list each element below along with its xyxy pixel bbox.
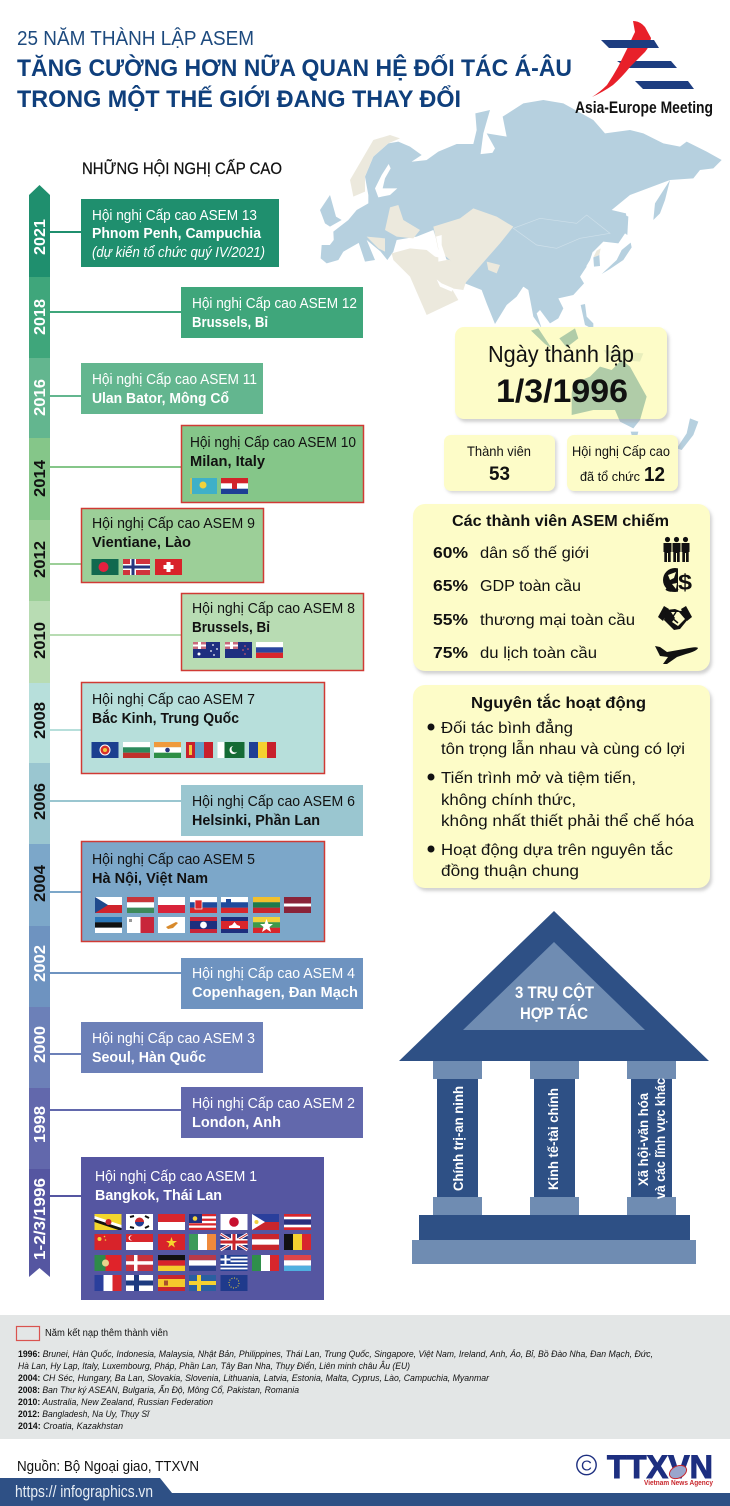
- panel: ASEM members share: thương mại toàn cầu: [480, 612, 635, 629]
- panel: membership notes: [0, 1315, 730, 1439]
- kicker: 25 NĂM THÀNH LẬP ASEM: [17, 27, 254, 50]
- member list by year: Hà Lan, Hy Lạp, Italy, Luxembourg, Pháp, Phần Lan, Tây Ban Nha, Thụy Điển, Liên minh châu Âu (EU): [18, 1361, 410, 1372]
- map showing through card: Australia and Indonesia: [531, 328, 647, 428]
- headline line 1: TĂNG CƯỜNG HƠN NỮA QUAN HỆ ĐỐI TÁC Á-ÂU: [17, 54, 572, 82]
- panel: founding date: 1/3/1996: [496, 373, 628, 409]
- panel: summits held: 12: [644, 464, 665, 486]
- member list by year: 2010: Australia, New Zealand, Russian Federation: [18, 1397, 213, 1408]
- panel: operating principles: không chính thức,: [441, 792, 576, 809]
- panel: operating principles: không nhất thiết phải thể chế hóa: [441, 812, 694, 830]
- pillar: politics and security: [433, 1061, 482, 1215]
- panel: ASEM 13: Hội nghị Cấp cao ASEM 13: [92, 208, 257, 224]
- timeline arrow with year segments: 2000: [32, 1026, 49, 1063]
- panel: ASEM 2: London, Anh: [192, 1115, 281, 1131]
- flags: Bangladesh, Norway, Switzerland: [92, 559, 182, 575]
- panel: ASEM 2: Hội nghị Cấp cao ASEM 2: [192, 1096, 355, 1112]
- panel: ASEM 3: [50, 1022, 263, 1073]
- pillar: economy and finance: Kinh tế-tài chính: [546, 1088, 561, 1190]
- panel: ASEM 12: Hội nghị Cấp cao ASEM 12: [192, 296, 357, 312]
- member list by year: 2004: CH Séc, Hungary, Ba Lan, Slovakia, Slovenia, Lithuania, Latvia, Estonia, Malta, Cyprus, Lào, Campuchia, Myanmar: [18, 1373, 490, 1384]
- panel: ASEM 6: Helsinki, Phần Lan: [192, 813, 320, 829]
- panel: ASEM 7: Hội nghị Cấp cao ASEM 7: [92, 692, 255, 708]
- panel: ASEM 9: Vientiane, Lào: [92, 535, 191, 551]
- flags: Kazakhstan, Croatia: [190, 478, 248, 494]
- member list by year: 2014: Croatia, Kazakhstan: [18, 1421, 123, 1432]
- chart: three pillars temple: [399, 911, 709, 1264]
- panel: ASEM members share: [413, 504, 712, 674]
- flags: 1996 row 2: [94, 1234, 311, 1250]
- pillar: society, culture and others: [627, 1061, 676, 1215]
- panel: ASEM 7: Bắc Kinh, Trung Quốc: [92, 709, 239, 727]
- icon: globe and dollar: [663, 566, 693, 595]
- panel: members count: [444, 435, 557, 493]
- pillar: economy and finance: [530, 1061, 579, 1215]
- timeline arrow with year segments: 2016: [32, 379, 49, 416]
- panel: ASEM members share: dân số thế giới: [480, 545, 589, 562]
- panel: ASEM members share: 55%: [433, 612, 468, 629]
- panel: ASEM 4: Hội nghị Cấp cao ASEM 4: [192, 966, 355, 982]
- icon: people: [664, 537, 690, 562]
- flags: 1996 row 1: [94, 1214, 311, 1230]
- flags: 2004 new members, row 2: [95, 917, 280, 933]
- panel: ASEM 10: [50, 426, 364, 502]
- panel: operating principles: Tiến trình mở và tiệm tiến,: [441, 770, 636, 787]
- icon: airplane: [655, 646, 698, 664]
- member list by year: 1996: Brunei, Hàn Quốc, Indonesia, Malaysia, Nhật Bản, Philippines, Thái Lan, Trung Quốc, Singapore, Việt Nam, Ireland, Anh, Áo, Bỉ, Bồ Đào Nha, Đan Mạch, Đức,: [18, 1349, 653, 1360]
- panel: ASEM 7: [50, 682, 324, 774]
- panel: ASEM 1: [50, 1157, 324, 1300]
- pillar: politics and security: Chính trị-an ninh: [451, 1086, 466, 1191]
- logo: TTXVN: TTXVN: [607, 1449, 713, 1485]
- timeline arrow with year segments: 2018: [32, 299, 49, 335]
- flags: 1996 row 4: [94, 1275, 248, 1291]
- panel: ASEM 13: Phnom Penh, Campuchia: [92, 226, 262, 242]
- source line: Nguồn: Bộ Ngoại giao, TTXVN: [17, 1458, 199, 1475]
- flags: 1996 row 3: [94, 1255, 311, 1271]
- logo: TTXVN: C: [581, 1458, 592, 1474]
- timeline arrow with year segments: 2010: [32, 622, 49, 659]
- timeline arrow with year segments: 2014: [32, 460, 49, 497]
- base steps: [412, 1215, 696, 1264]
- member list by year: 2012: Bangladesh, Na Uy, Thụy Sĩ: [18, 1409, 151, 1420]
- panel: ASEM 9: Hội nghị Cấp cao ASEM 9: [92, 516, 255, 532]
- icon: handshake: [658, 606, 692, 630]
- timeline arrow with year segments: 1998: [32, 1106, 49, 1143]
- panel: ASEM 12: [50, 287, 363, 338]
- panel: operating principles: đồng thuận chung: [441, 863, 579, 880]
- timeline arrow with year segments: 2008: [32, 702, 49, 739]
- panel: members count: 53: [489, 463, 510, 485]
- roof: [399, 911, 709, 1061]
- legend: Năm kết nạp thêm thành viên: [45, 1327, 168, 1339]
- panel: ASEM 8: [50, 594, 364, 670]
- title block: [17, 27, 572, 113]
- panel: ASEM 6: [50, 785, 363, 836]
- panel: summits held: [567, 435, 680, 493]
- panel: ASEM 6: Hội nghị Cấp cao ASEM 6: [192, 794, 355, 810]
- panel: ASEM members share: 60%: [433, 545, 468, 562]
- panel: operating principles: Đối tác bình đẳng: [441, 718, 573, 737]
- roof inner triangle with heading: 3 TRỤ CỘT: [515, 983, 594, 1002]
- panel: ASEM 5: [50, 842, 324, 942]
- panel: ASEM 3: Hội nghị Cấp cao ASEM 3: [92, 1031, 255, 1047]
- panel: operating principles: [413, 685, 712, 891]
- panel: ASEM 13: (dự kiến tổ chức quý IV/2021): [92, 245, 265, 261]
- panel: ASEM 10: Milan, Italy: [190, 454, 265, 470]
- footer bar with URL: https:// infographics.vn: [15, 1483, 153, 1501]
- pillar: society, culture and others: và các lĩnh vực khác: [653, 1078, 668, 1199]
- panel: ASEM 3: Seoul, Hàn Quốc: [92, 1050, 206, 1066]
- panel: operating principles: Nguyên tắc hoạt động: [471, 693, 646, 712]
- panel: ASEM members share: GDP toàn cầu: [480, 578, 581, 595]
- panel: ASEM 10: Hội nghị Cấp cao ASEM 10: [190, 435, 356, 451]
- panel: ASEM 1: Hội nghị Cấp cao ASEM 1: [95, 1169, 257, 1185]
- panel: summits held: Hội nghị Cấp cao: [572, 443, 670, 459]
- pillar: society, culture and others: Xã hội-văn hóa: [636, 1093, 651, 1186]
- panel: ASEM 8: Brussels, Bỉ: [192, 620, 270, 636]
- member list by year: 2008: Ban Thư ký ASEAN, Bulgaria, Ấn Độ, Mông Cổ, Pakistan, Romania: [18, 1384, 299, 1396]
- logo: TTXVN: Vietnam News Agency: [644, 1480, 713, 1487]
- panel: ASEM 4: Copenhagen, Đan Mạch: [192, 985, 358, 1001]
- panel: operating principles: Hoạt động dựa trên nguyên tắc: [441, 840, 673, 859]
- panel: ASEM 11: [50, 363, 263, 414]
- panel: ASEM 11: Hội nghị Cấp cao ASEM 11: [92, 372, 257, 388]
- panel: ASEM 8: Hội nghị Cấp cao ASEM 8: [192, 601, 355, 617]
- panel: members count: Thành viên: [467, 443, 531, 459]
- panel: ASEM 13: [50, 199, 279, 267]
- roof inner triangle with heading: [463, 942, 645, 1030]
- panel: operating principles: tôn trọng lẫn nhau và cùng có lợi: [441, 739, 685, 758]
- headline line 2: TRONG MỘT THẾ GIỚI ĐANG THAY ĐỔI: [17, 85, 461, 113]
- flags: ASEAN, Bulgaria, India, Mongolia, Pakistan, Romania: [92, 742, 276, 758]
- flags: 2004 new members, row 1: [95, 897, 311, 913]
- footer bar with URL: [0, 1478, 730, 1506]
- world map: Eurasia and Australia: [320, 100, 722, 450]
- panel: ASEM 1: Bangkok, Thái Lan: [95, 1188, 222, 1204]
- flags: Australia, New Zealand, Russia: [193, 642, 283, 658]
- legend: [16, 1326, 168, 1340]
- panel: ASEM members share: 75%: [433, 645, 468, 662]
- panel: ASEM 12: Brussels, Bỉ: [192, 315, 268, 331]
- timeline arrow with year segments: 2002: [32, 945, 49, 982]
- panel: ASEM 9: [50, 508, 264, 582]
- panel: founding date: [455, 327, 669, 428]
- panel: ASEM 5: Hà Nội, Việt Nam: [92, 871, 208, 887]
- panel: ASEM members share: 65%: [433, 578, 468, 595]
- timeline arrow with year segments: 2004: [32, 865, 49, 902]
- panel: ASEM members share: du lịch toàn cầu: [480, 645, 597, 662]
- timeline arrow with year segments: 1-2/3/1996: [32, 1178, 49, 1260]
- timeline arrow with year segments: 2012: [32, 541, 49, 578]
- panel: founding date: Ngày thành lập: [488, 341, 634, 367]
- panel: ASEM 2: [50, 1087, 363, 1138]
- panel: ASEM 5: Hội nghị Cấp cao ASEM 5: [92, 852, 255, 868]
- panel: ASEM 11: Ulan Bator, Mông Cổ: [92, 391, 229, 407]
- icon: globe and dollar: $: [678, 570, 692, 595]
- timeline arrow with year segments: [29, 185, 50, 1277]
- member list by year: [18, 1349, 653, 1432]
- panel: ASEM 4: [50, 958, 363, 1009]
- panel: ASEM members share: Các thành viên ASEM chiếm: [452, 513, 669, 530]
- panel: summits held: đã tổ chức: [580, 469, 640, 484]
- roof inner triangle with heading: HỢP TÁC: [520, 1004, 588, 1023]
- timeline heading: NHỮNG HỘI NGHỊ CẤP CAO: [82, 158, 282, 178]
- timeline arrow with year segments: 2006: [32, 783, 49, 820]
- timeline arrow with year segments: 2021: [32, 219, 49, 255]
- logo: Asia-Europe Meeting: [575, 21, 713, 117]
